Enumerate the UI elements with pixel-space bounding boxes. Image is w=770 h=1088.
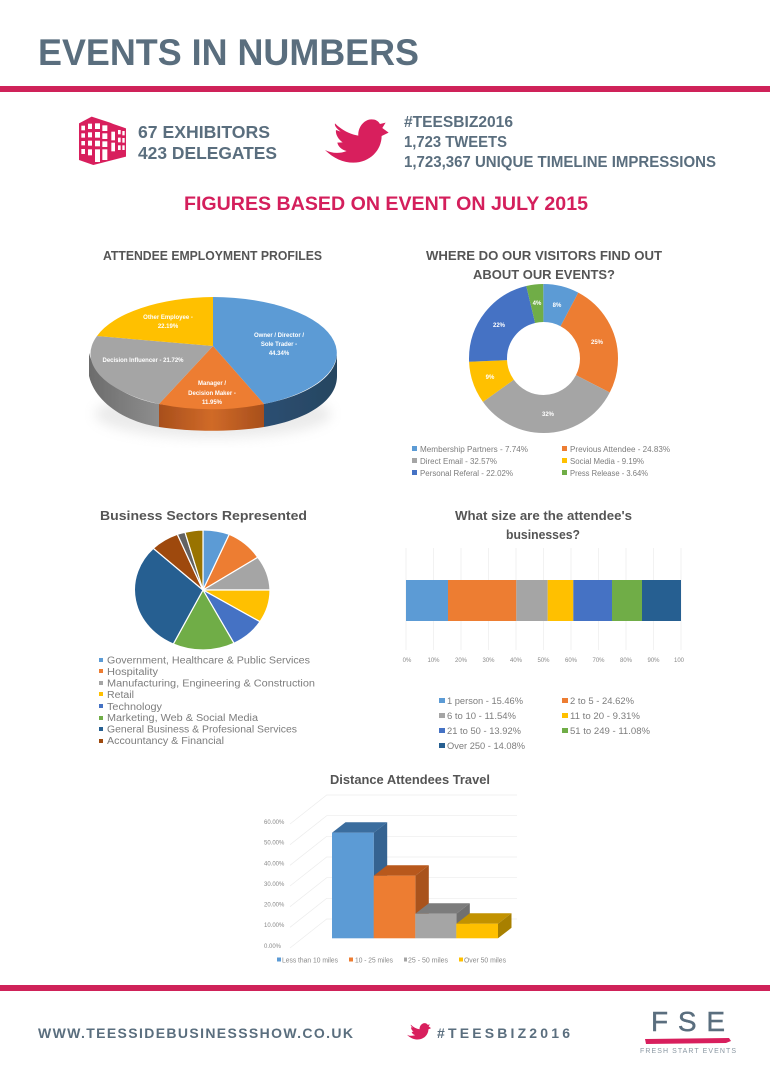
3D pie chart: Other Employee - <box>143 315 193 321</box>
footer hashtag: #TEESBIZ2016 <box>437 1025 570 1041</box>
size legend <box>439 696 650 751</box>
logo: FSE <box>640 1006 736 1055</box>
size legend: 11 to 20 - 9.31% <box>570 711 640 721</box>
chart heading: ABOUT OUR EVENTS? <box>473 267 615 282</box>
sector legend: General Business & Profesional Services <box>107 724 297 736</box>
stacked bar chart: 0% <box>403 658 412 664</box>
distance legend: 10 - 25 miles <box>355 958 393 964</box>
panel: where visitors find out about events <box>412 248 670 478</box>
stacked bar chart: 10% <box>427 658 440 664</box>
stacked bar chart: 80% <box>620 658 633 664</box>
chart heading: Business Sectors Represented <box>100 508 307 523</box>
distance legend: 25 - 50 miles <box>408 958 448 964</box>
donut legend: Social Media - 9.19% <box>570 457 644 466</box>
3D pie chart: Sole Trader - <box>261 342 297 348</box>
sector legend: Hospitality <box>107 667 158 678</box>
donut legend <box>412 445 670 478</box>
donut chart: 9% <box>486 375 495 381</box>
3D pie chart: Decision Maker - <box>188 391 236 397</box>
size legend: 2 to 5 - 24.62% <box>570 696 634 706</box>
stat: exhibitors and delegates <box>138 122 277 163</box>
chart heading: Distance Attendees Travel <box>330 772 490 787</box>
panel: business sectors represented <box>99 508 315 747</box>
stat: twitter figures: 1,723,367 UNIQUE TIMELINE IMPRESSIONS <box>404 154 716 171</box>
size legend: 51 to 249 - 11.08% <box>570 726 650 736</box>
stat: twitter figures <box>404 114 716 171</box>
size legend: Over 250 - 14.08% <box>447 741 525 751</box>
title: EVENTS IN NUMBERS <box>38 32 419 73</box>
stacked bar chart: 90% <box>647 658 660 664</box>
pie chart <box>134 530 270 650</box>
3D bar chart: 50.00% <box>264 840 285 846</box>
donut chart: 32% <box>542 412 555 418</box>
donut legend: Personal Referal - 22.02% <box>420 469 513 478</box>
stacked bar chart: 100 <box>674 658 685 664</box>
size legend: 6 to 10 - 11.54% <box>447 711 516 721</box>
icon: building <box>79 117 126 165</box>
stat: exhibitors and delegates: 67 EXHIBITORS <box>138 122 270 142</box>
sector legend: Government, Healthcare & Public Services <box>107 656 310 666</box>
sector legend <box>99 656 315 747</box>
stacked bar chart: 20% <box>455 658 468 664</box>
sector legend: Manufacturing, Engineering & Construction <box>107 678 315 690</box>
chart heading: businesses? <box>506 527 580 542</box>
chart heading: What size are the attendee's <box>455 508 632 523</box>
footer rule <box>0 985 770 991</box>
donut legend: Direct Email - 32.57% <box>420 457 497 466</box>
sector legend: Accountancy & Financial <box>107 736 224 747</box>
3D bar chart: 0.00% <box>264 944 282 950</box>
donut legend: Press Release - 3.64% <box>570 469 648 478</box>
3D bar chart: 30.00% <box>264 882 285 888</box>
donut legend: Previous Attendee - 24.83% <box>570 445 670 454</box>
3D bar chart: 60.00% <box>264 820 285 826</box>
subheading: FIGURES BASED ON EVENT ON JULY 2015 <box>184 193 588 215</box>
distance legend: Over 50 miles <box>464 958 506 964</box>
3D pie chart: 11.95% <box>202 400 223 406</box>
donut legend: Membership Partners - 7.74% <box>420 445 528 454</box>
sector legend: Retail <box>107 690 134 701</box>
3D bar chart: 40.00% <box>264 862 285 868</box>
chart heading <box>455 508 632 542</box>
donut chart: 4% <box>533 301 542 307</box>
donut chart: 22% <box>493 323 506 329</box>
stat: exhibitors and delegates: 423 DELEGATES <box>138 143 277 163</box>
logo: FSE: FSE <box>651 1006 725 1037</box>
stat: twitter figures: #TEESBIZ2016 <box>404 114 513 131</box>
distance legend: Less than 10 miles <box>282 958 338 964</box>
size legend: 1 person - 15.46% <box>447 696 523 706</box>
logo: FSE: FRESH START EVENTS <box>640 1048 736 1055</box>
donut chart <box>486 301 604 418</box>
stacked bar chart: 40% <box>510 658 523 664</box>
stat: twitter figures: 1,723 TWEETS <box>404 134 507 151</box>
3D pie chart: Decision Influencer - 21.72% <box>102 358 184 364</box>
distance legend <box>277 958 506 964</box>
3D bar chart: 10.00% <box>264 923 285 929</box>
donut chart: 8% <box>553 303 562 309</box>
stacked bar chart: 50% <box>537 658 550 664</box>
stacked bar chart: 70% <box>592 658 605 664</box>
icon: twitter bird <box>325 119 389 163</box>
icon: footer twitter bird <box>407 1023 431 1039</box>
panel: attendee employment profiles <box>89 249 337 438</box>
stacked bar chart: 60% <box>565 658 578 664</box>
size legend: 21 to 50 - 13.92% <box>447 726 521 736</box>
3D pie chart: 44.34% <box>269 351 290 357</box>
chart heading: WHERE DO OUR VISITORS FIND OUT <box>426 248 662 263</box>
3D bar chart <box>264 795 517 950</box>
stacked bar chart: 30% <box>482 658 495 664</box>
3D pie chart: Owner / Director / <box>254 333 304 339</box>
sector legend: Marketing, Web & Social Media <box>107 713 258 724</box>
3D pie chart: 22.19% <box>158 324 179 330</box>
chart heading: ATTENDEE EMPLOYMENT PROFILES <box>103 249 322 263</box>
3D bar chart: 20.00% <box>264 902 285 908</box>
stacked bar chart <box>403 548 685 664</box>
chart heading <box>426 248 662 282</box>
panel: distance attendees travel <box>264 772 517 964</box>
3D pie chart: Manager / <box>198 381 226 387</box>
footer website: WWW.TEESSIDEBUSINESSSHOW.CO.UK <box>38 1025 353 1041</box>
sector legend: Technology <box>107 702 162 713</box>
header rule <box>0 86 770 92</box>
panel: attendee business size <box>403 508 685 751</box>
donut chart: 25% <box>591 340 604 346</box>
3D pie chart <box>89 297 337 438</box>
